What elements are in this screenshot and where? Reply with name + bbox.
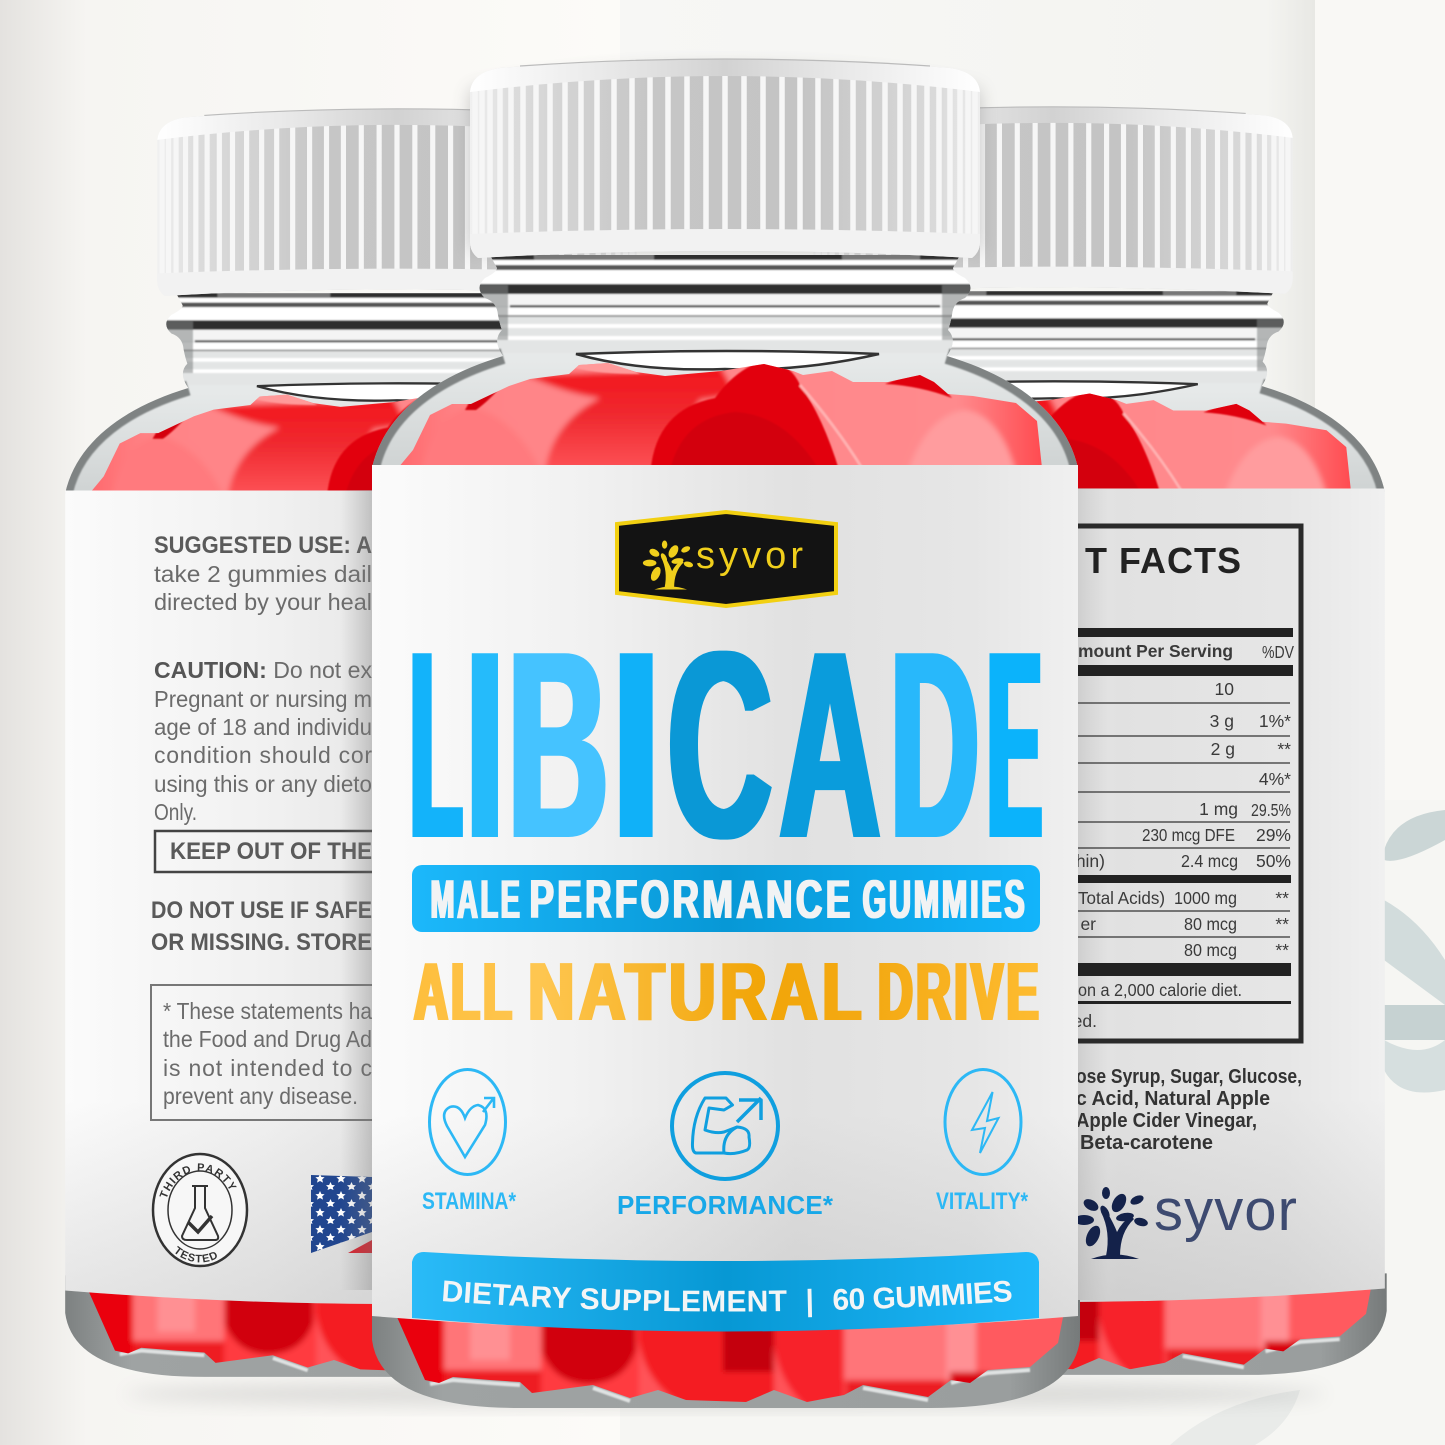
tagline: DRIVE bbox=[878, 945, 1042, 1038]
bottle: front centre: E bbox=[988, 595, 1042, 894]
product name: L bbox=[410, 595, 462, 894]
supplement facts panel: 1 mg bbox=[1199, 799, 1238, 819]
keep out box bbox=[155, 831, 372, 872]
benefit: stamina bbox=[422, 1070, 517, 1215]
supplement facts panel: 4%* bbox=[1259, 769, 1291, 789]
disclaimer box: prevent any disease. bbox=[163, 1083, 358, 1109]
disclaimer box: * These statements ha bbox=[163, 998, 372, 1024]
warning text bbox=[151, 897, 372, 956]
ingredients text bbox=[1076, 1066, 1302, 1154]
benefit: performance bbox=[617, 1073, 834, 1220]
product name: I bbox=[466, 595, 503, 894]
background leaf right bbox=[1384, 810, 1445, 1092]
ingredients text: ose Syrup, Sugar, Glucose, bbox=[1076, 1066, 1302, 1088]
supplement facts panel: 50% bbox=[1256, 851, 1291, 871]
supplement facts panel: mount Per Serving bbox=[1078, 641, 1233, 661]
supplement facts panel: ** bbox=[1275, 914, 1289, 934]
product name: C bbox=[668, 595, 772, 894]
supplement facts panel: er bbox=[1080, 914, 1096, 934]
left label text: condition should cor bbox=[154, 742, 372, 768]
left label text: SUGGESTED USE: A bbox=[154, 532, 372, 559]
subtitle band: MALE bbox=[430, 868, 522, 930]
supplement facts panel: 1000 mg bbox=[1174, 888, 1237, 908]
left label text: Only. bbox=[154, 799, 197, 825]
benefit: vitality bbox=[936, 1070, 1029, 1215]
left label text: CAUTION: Do not ex bbox=[154, 657, 372, 683]
subtitle band: GUMMIES bbox=[862, 868, 1028, 930]
warning text: DO NOT USE IF SAFE bbox=[151, 897, 372, 924]
product name: I bbox=[611, 595, 661, 894]
left label text: directed by your heal bbox=[154, 589, 372, 615]
brand logo badge bbox=[617, 512, 836, 606]
disclaimer box: is not intended to c bbox=[163, 1055, 372, 1081]
bottle: back left bbox=[65, 108, 771, 1408]
supplement facts panel: hin) bbox=[1076, 851, 1105, 871]
supplement facts panel: ** bbox=[1277, 739, 1291, 759]
supplement facts panel: 2.4 mcg bbox=[1181, 851, 1238, 871]
bottle: front centre bbox=[372, 58, 1080, 1408]
footer band: DIETARY SUPPLEMENT bbox=[443, 1280, 786, 1312]
supplement facts panel: ed. bbox=[1073, 1011, 1097, 1031]
supplement facts panel: ** bbox=[1275, 888, 1289, 908]
icon: lightning bolt bbox=[945, 1070, 1021, 1174]
ingredients text: c Acid, Natural Apple bbox=[1076, 1088, 1270, 1110]
supplement facts panel: T FACTS bbox=[1085, 540, 1241, 581]
supplement facts panel: 80 mcg bbox=[1184, 940, 1237, 960]
supplement facts panel: Total Acids) bbox=[1078, 888, 1165, 908]
left label text bbox=[154, 532, 372, 825]
benefit: stamina: STAMINA* bbox=[422, 1188, 517, 1215]
left label text: using this or any dieto bbox=[154, 771, 372, 797]
supplement facts panel: 29% bbox=[1256, 825, 1291, 845]
supplement facts panel: 3 g bbox=[1210, 711, 1234, 731]
left label text: age of 18 and individu bbox=[154, 714, 372, 740]
product name: A bbox=[780, 595, 880, 894]
left label text: Pregnant or nursing m bbox=[154, 686, 372, 712]
disclaimer box bbox=[151, 985, 372, 1120]
supplement facts panel: on a 2,000 calorie diet. bbox=[1078, 980, 1242, 1000]
subtitle band: PERFORMANCE bbox=[530, 868, 854, 930]
ingredients text: Apple Cider Vinegar, bbox=[1076, 1110, 1257, 1132]
product name: D bbox=[891, 595, 979, 894]
keep out box: KEEP OUT OF THE bbox=[170, 838, 372, 865]
icon: third party tested badge bbox=[152, 1152, 248, 1268]
tagline: NATURAL bbox=[528, 945, 866, 1038]
product name bbox=[410, 595, 1042, 894]
syvor logo, navy bbox=[1074, 1178, 1297, 1259]
disclaimer box: the Food and Drug Ad bbox=[163, 1026, 372, 1052]
floor shadow bbox=[125, 1380, 1325, 1408]
footer band bbox=[412, 1252, 1039, 1332]
icon: flexed arm with arrow bbox=[672, 1073, 778, 1179]
product name: B bbox=[508, 595, 608, 894]
supplement facts panel: ** bbox=[1275, 940, 1289, 960]
icon: american flag bbox=[311, 1175, 372, 1253]
supplement facts panel bbox=[1070, 526, 1301, 1041]
supplement facts panel: %DV bbox=[1262, 642, 1294, 662]
supplement facts panel: 29.5% bbox=[1251, 800, 1291, 820]
ingredients text: Beta-carotene bbox=[1080, 1132, 1213, 1154]
supplement facts panel: 2 g bbox=[1211, 739, 1235, 759]
background leaf bottom bbox=[1170, 1390, 1300, 1445]
supplement facts panel: 10 bbox=[1215, 679, 1234, 699]
supplement facts panel: 1%* bbox=[1259, 711, 1291, 731]
supplement facts panel: 230 mcg DFE bbox=[1142, 825, 1235, 845]
tagline: ALL bbox=[414, 945, 515, 1038]
footer band: 60 GUMMIES bbox=[834, 1280, 1012, 1310]
bottle: back right bbox=[721, 107, 1387, 1382]
syvor logo, navy: syvor bbox=[1154, 1178, 1297, 1243]
supplement facts panel: 80 mcg bbox=[1184, 914, 1237, 934]
warning text: OR MISSING. STORE bbox=[151, 929, 372, 956]
icon: third party tested badge: TESTED bbox=[175, 1246, 217, 1262]
benefit: performance: PERFORMANCE* bbox=[617, 1190, 834, 1220]
icon: third party tested badge: THIRD PARTY bbox=[159, 1163, 237, 1197]
left label text: take 2 gummies dail bbox=[154, 561, 372, 587]
brand logo badge: syvor bbox=[696, 535, 803, 577]
benefit: vitality: VITALITY* bbox=[936, 1188, 1029, 1215]
tagline bbox=[414, 945, 1042, 1038]
footer band: | bbox=[808, 1288, 812, 1318]
icon: heart with male symbol bbox=[430, 1070, 506, 1174]
shadow from centre bottle bbox=[340, 490, 372, 1290]
